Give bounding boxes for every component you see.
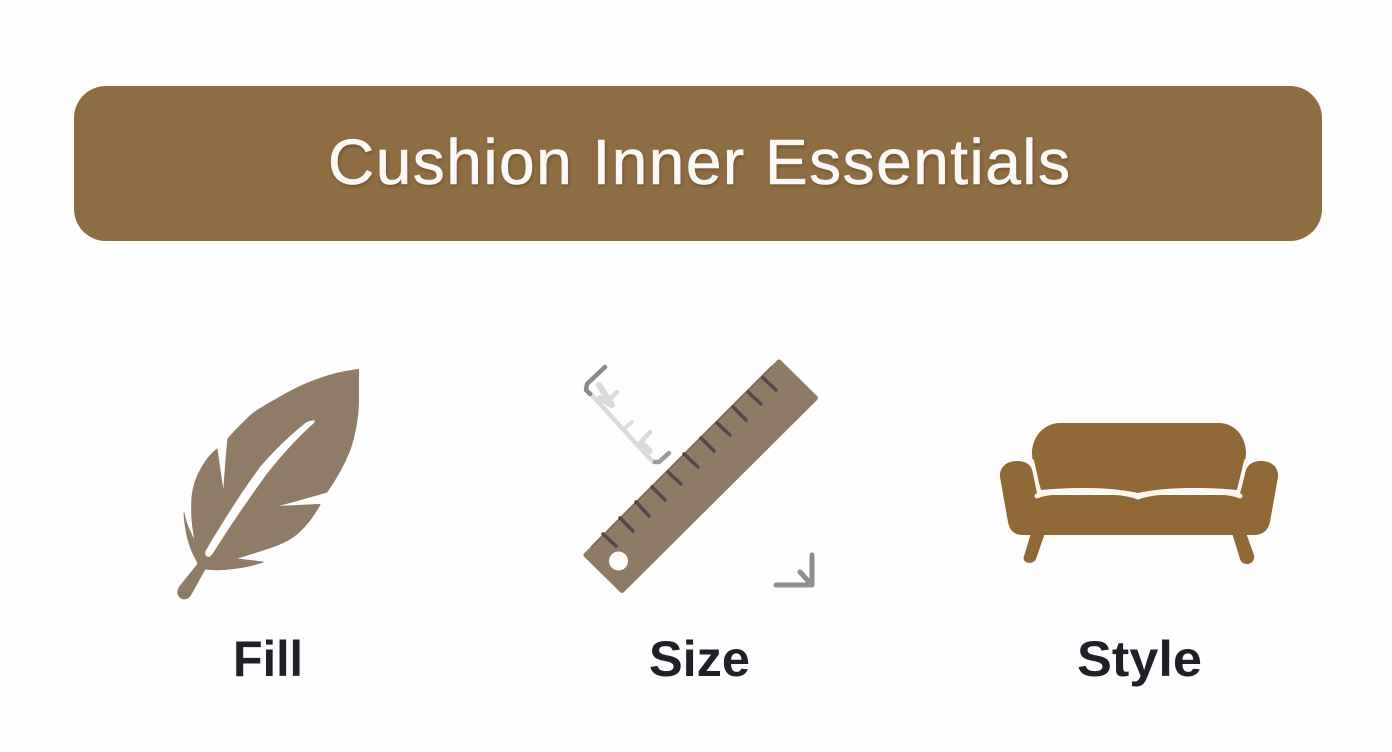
- ruler hole: [609, 552, 628, 570]
- sofa arm gap right: [1238, 461, 1246, 493]
- corner bracket lower: [655, 453, 669, 462]
- small ruler ghost: [590, 385, 653, 462]
- sofa legs: [1024, 533, 1045, 563]
- label: Fill: Fill: [233, 631, 303, 687]
- sofa arm gap left: [1032, 461, 1039, 493]
- sofa cushion line: [1037, 491, 1240, 497]
- icon: ruler: [586, 362, 816, 590]
- corner bracket top-left: [586, 367, 605, 394]
- icon: sofa: [1000, 423, 1278, 564]
- ruler top edge shade: [591, 366, 772, 547]
- title: Cushion Inner Essentials: [328, 126, 1070, 198]
- sofa base and arms: [1000, 461, 1278, 535]
- label: Style: Style: [1077, 631, 1202, 687]
- title banner: [74, 86, 1322, 241]
- sofa back: [1032, 423, 1246, 493]
- label: Size: Size: [649, 631, 750, 687]
- feather vein: [205, 420, 315, 557]
- ruler ticks: [603, 378, 776, 546]
- icon: feather: [178, 370, 358, 599]
- corner arrow bottom-right: [776, 555, 812, 585]
